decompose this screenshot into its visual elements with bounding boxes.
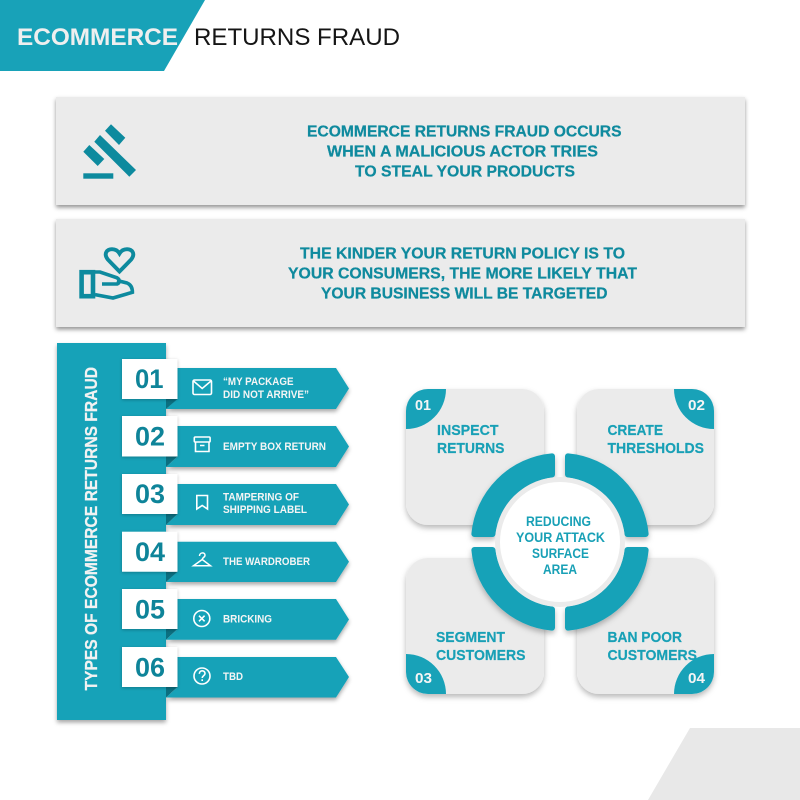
item 03: TAMPERING OF xyxy=(223,492,299,504)
card 02: create thresholds: CREATE xyxy=(608,422,663,439)
icon: envelope xyxy=(193,380,212,394)
title: ECOMMERCE xyxy=(17,24,178,51)
card 01: inspect returns xyxy=(406,389,544,525)
item 03 xyxy=(122,474,349,525)
item 01: DID NOT ARRIVE” xyxy=(223,389,309,401)
item 06: TBD xyxy=(223,671,243,683)
definition text: TO STEAL YOUR PRODUCTS xyxy=(355,164,575,181)
card 01: inspect returns: RETURNS xyxy=(437,440,504,457)
item 02 xyxy=(122,416,349,467)
card 04: ban poor customers: BAN POOR xyxy=(608,629,682,646)
column background xyxy=(57,343,166,720)
card 03: segment customers: CUSTOMERS xyxy=(436,647,526,664)
icon: archive box xyxy=(194,437,210,452)
center circle: AREA xyxy=(543,562,577,577)
icon: bookmark xyxy=(197,496,208,509)
item 02: 02 xyxy=(135,422,165,452)
center circle xyxy=(498,480,622,604)
item 05 xyxy=(122,589,349,640)
decorative corner shape xyxy=(648,728,800,800)
card 03: segment customers: 03 xyxy=(415,670,432,687)
icon: circled x xyxy=(194,610,210,626)
ring segments xyxy=(474,456,646,628)
item 03: 03 xyxy=(135,479,165,509)
center circle: SURFACE xyxy=(532,546,589,561)
return policy text: YOUR BUSINESS WILL BE TARGETED xyxy=(321,285,608,302)
center circle: YOUR ATTACK xyxy=(516,530,605,545)
item 05: 05 xyxy=(135,594,165,624)
title: RETURNS FRAUD xyxy=(194,24,400,51)
return policy text: THE KINDER YOUR RETURN POLICY IS TO xyxy=(300,245,625,262)
diagram: reducing your attack surface area xyxy=(406,389,714,694)
item 06 xyxy=(122,647,349,698)
panel: definition xyxy=(56,97,745,205)
panel: types of ecommerce returns fraud xyxy=(57,343,349,720)
card 02: create thresholds: 02 xyxy=(688,397,705,414)
card 03: segment customers xyxy=(406,558,544,694)
item 05: BRICKING xyxy=(223,614,272,626)
item 01: “MY PACKAGE xyxy=(223,376,294,388)
item 01: 01 xyxy=(135,364,164,394)
icon: circled question mark xyxy=(194,668,210,684)
item 03: SHIPPING LABEL xyxy=(223,504,307,516)
card 01: inspect returns: INSPECT xyxy=(437,422,498,439)
column heading: TYPES OF ECOMMERCE RETURNS FRAUD xyxy=(81,367,101,690)
icon: hanger xyxy=(194,553,210,566)
item 04 xyxy=(122,532,349,582)
card 01: inspect returns: 01 xyxy=(415,397,431,414)
card 04: ban poor customers xyxy=(577,558,714,694)
item 04: THE WARDROBER xyxy=(223,556,310,568)
title xyxy=(0,0,400,71)
center circle: REDUCING xyxy=(526,514,591,529)
item 04: 04 xyxy=(135,537,165,567)
definition text xyxy=(307,124,622,181)
card 02: create thresholds xyxy=(577,389,714,525)
item 02: EMPTY BOX RETURN xyxy=(223,441,326,453)
panel: return policy xyxy=(56,219,745,327)
return policy text xyxy=(288,245,637,302)
definition text: ECOMMERCE RETURNS FRAUD OCCURS xyxy=(307,124,622,141)
item 06: 06 xyxy=(135,652,165,682)
card 04: ban poor customers: 04 xyxy=(688,670,706,687)
card 03: segment customers: SEGMENT xyxy=(436,629,505,646)
item 01 xyxy=(122,359,349,409)
return policy text: YOUR CONSUMERS, THE MORE LIKELY THAT xyxy=(288,265,637,282)
card 04: ban poor customers: CUSTOMERS xyxy=(608,647,697,664)
icon: hand holding heart xyxy=(82,249,133,298)
icon: gavel xyxy=(83,124,136,179)
card 02: create thresholds: THRESHOLDS xyxy=(608,440,704,457)
definition text: WHEN A MALICIOUS ACTOR TRIES xyxy=(327,144,598,161)
